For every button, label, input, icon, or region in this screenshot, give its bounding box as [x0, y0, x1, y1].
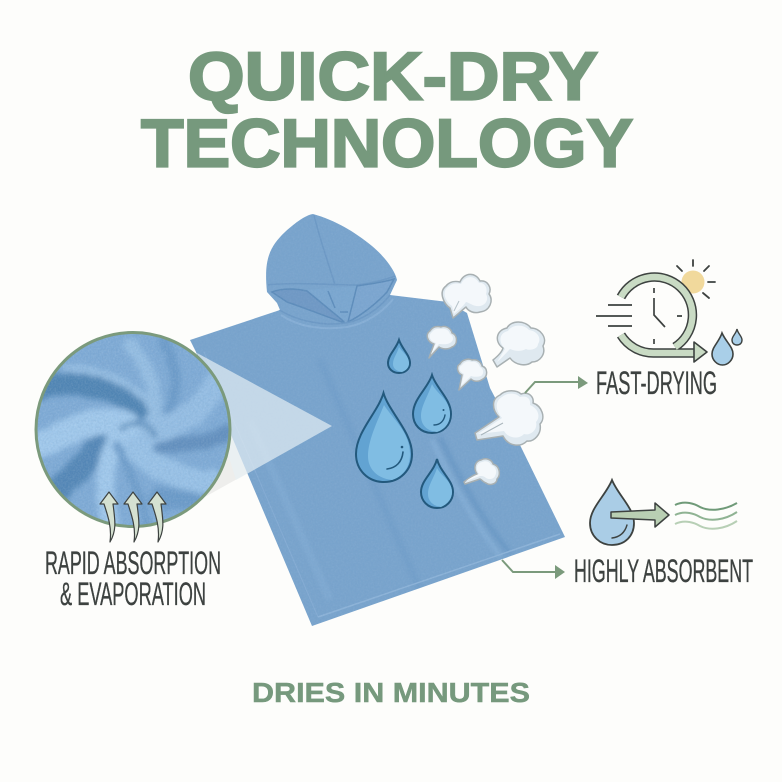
drop: small top — [388, 340, 410, 373]
waves — [675, 503, 737, 510]
water drops — [356, 340, 453, 508]
title — [141, 38, 633, 182]
fabric close-up circle — [35, 332, 231, 528]
small drops — [712, 333, 733, 365]
poncho body and hood — [190, 214, 565, 626]
arrow 2 — [124, 492, 142, 542]
tagline: DRIES IN MINUTES — [252, 677, 530, 708]
poncho — [190, 214, 565, 626]
arrow 1 — [100, 492, 118, 542]
swirl creases — [117, 445, 147, 525]
connector arrow: fast-drying — [525, 376, 588, 393]
hood inner back — [305, 286, 357, 320]
cloud 3 — [427, 326, 456, 358]
cloud 6 — [464, 459, 499, 484]
steam clouds — [427, 274, 545, 484]
hood left flap — [272, 289, 345, 323]
cloud 1 — [442, 274, 491, 318]
sun — [677, 260, 715, 298]
connector arrow: highly absorbent — [502, 560, 565, 579]
drop: lower — [421, 459, 453, 508]
arrow 3 — [148, 492, 166, 542]
label: rapid absorption: RAPID ABSORPTION — [45, 545, 221, 581]
clock ring arrow — [621, 277, 697, 353]
title: QUICK-DRY — [188, 38, 598, 114]
label: rapid absorption — [45, 545, 221, 612]
hem — [318, 534, 560, 617]
clock hands and ticks — [654, 288, 682, 344]
cloud 2 — [493, 322, 545, 367]
hood seam — [314, 215, 335, 285]
cloud 5 — [475, 391, 543, 445]
speed lines — [596, 305, 632, 326]
dark folds — [43, 384, 143, 408]
label: rapid absorption: & EVAPORATION — [60, 576, 206, 612]
magnifier cone shadow — [197, 353, 332, 498]
evaporation arrows — [100, 492, 166, 542]
drop: medium — [413, 375, 451, 433]
title: TECHNOLOGY — [141, 106, 633, 182]
fabric folds — [440, 437, 510, 553]
drop: large — [356, 393, 412, 482]
icon: absorbent drop and waves — [590, 480, 737, 545]
cloud 4 — [458, 359, 487, 390]
light folds — [67, 368, 150, 405]
collar — [278, 295, 390, 324]
hood right flap — [348, 279, 394, 322]
icon: fast-drying clock — [596, 260, 742, 365]
magnifier cone highlight — [197, 353, 332, 480]
